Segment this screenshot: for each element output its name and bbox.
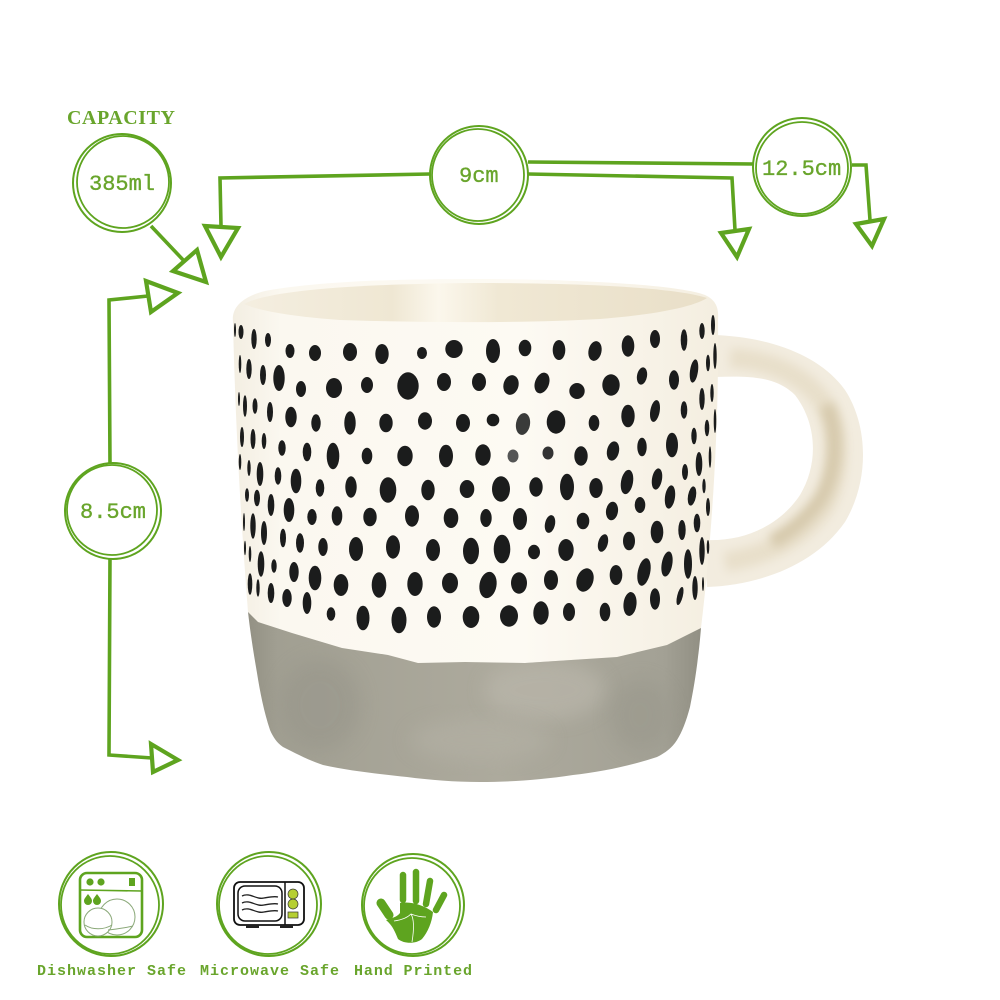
heading: capacity: CAPACITY [67, 107, 176, 129]
diameter badge: 9cm [459, 164, 499, 189]
mug unglazed grey base [248, 612, 701, 782]
arrow: capacity [151, 226, 206, 282]
arrow: overall width [528, 162, 884, 246]
arrow: diameter left [205, 174, 430, 257]
width badge [753, 118, 851, 216]
mug handle [706, 335, 863, 587]
diameter badge [430, 126, 528, 224]
caption: dishwasher safe: Dishwasher Safe [37, 963, 186, 980]
icon: microwave safe [217, 852, 321, 956]
height dimension with arrows [65, 281, 178, 772]
polka dots [234, 315, 717, 633]
caption: microwave safe: Microwave Safe [200, 963, 339, 980]
capacity badge: 385ml [89, 172, 155, 197]
width badge: 12.5cm [762, 157, 841, 182]
arrow: diameter right [528, 174, 749, 257]
capacity badge [73, 134, 171, 232]
mug interior [244, 283, 707, 322]
height dimension with arrows: 8.5cm [80, 500, 146, 525]
mug photo [233, 279, 870, 790]
icon: dishwasher safe [59, 852, 163, 956]
caption: hand printed: Hand Printed [354, 963, 472, 980]
mug glazed body [233, 279, 718, 675]
icon: hand printed [362, 854, 464, 956]
